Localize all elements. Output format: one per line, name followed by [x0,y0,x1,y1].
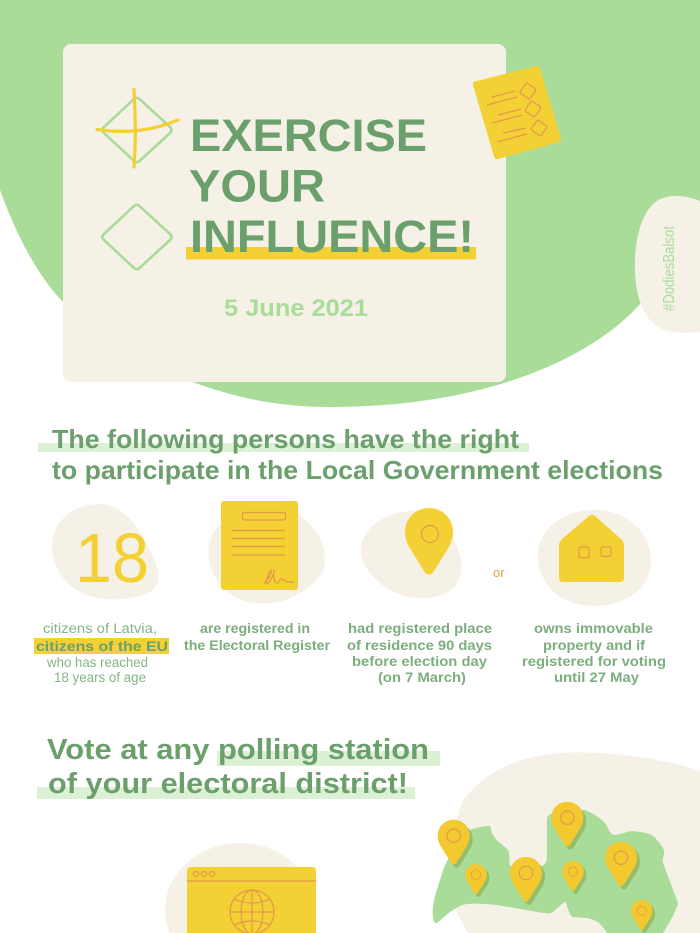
title [189,110,474,262]
icon: location pin [361,508,461,598]
map pin 4 [551,802,586,850]
text: registered residence [347,621,493,685]
polling heading highlights [37,751,440,799]
text: citizens [34,621,169,685]
green background blob [0,0,700,407]
section heading: polling station: of your electoral district! [48,768,408,800]
section heading: right to participate [52,424,663,485]
text: immovable property: owns immovable [534,621,654,636]
section heading: polling station [47,734,429,800]
title: EXERCISE [190,110,427,161]
text: electoral register: the Electoral Register [184,638,331,653]
section heading: polling station: Vote at any polling station [47,734,429,766]
map pin 1 [438,820,473,868]
map pin 7 [631,900,655,933]
icon: checked ballot diamond [97,90,178,167]
text: citizens: who has reached [46,655,148,670]
map blob [452,752,700,933]
title: YOUR [189,160,325,212]
or label: or [493,565,505,580]
text: electoral register [184,621,331,653]
title card [63,44,506,382]
text: electoral register: are registered in [200,621,310,636]
icon: age 18 [52,504,158,599]
icon: house [538,510,651,606]
text: citizens: 18 years of age [54,670,146,685]
hashtag blob: #DodiesBalsot [661,226,678,311]
text: registered residence: had registered place [348,621,493,636]
title: INFLUENCE! [190,211,474,262]
text: citizens: citizens of the EU [36,639,168,654]
text: immovable property: property and if [543,638,646,653]
title underline [186,247,476,260]
text: registered residence: of residence 90 days [347,638,492,653]
date: 5 June 2021 [224,295,368,322]
map of Latvia [433,810,678,933]
text: registered residence: before election day [352,654,488,669]
icon: age 18: 18 [75,519,149,597]
icon: signed document [208,501,325,603]
hashtag blob [635,196,700,333]
text: registered residence: (on 7 March) [378,670,466,685]
text: immovable property [522,621,666,685]
section heading: right to participate: The following persons have the right [52,424,519,454]
icon: checklist note [473,66,561,159]
icon: empty ballot diamond [102,205,172,269]
heading highlight [38,443,529,452]
map pin 6 [605,842,640,890]
section heading: right to participate: to participate in the Local Government elections [52,455,663,485]
icon: browser with globe [165,843,316,933]
map pin 3 [510,857,545,905]
text: citizens: citizens of Latvia, [43,621,157,636]
text: immovable property: registered for voting [522,654,666,669]
text: immovable property: until 27 May [554,670,640,685]
map pin 2 [465,864,489,897]
map pin 5 [562,861,586,894]
